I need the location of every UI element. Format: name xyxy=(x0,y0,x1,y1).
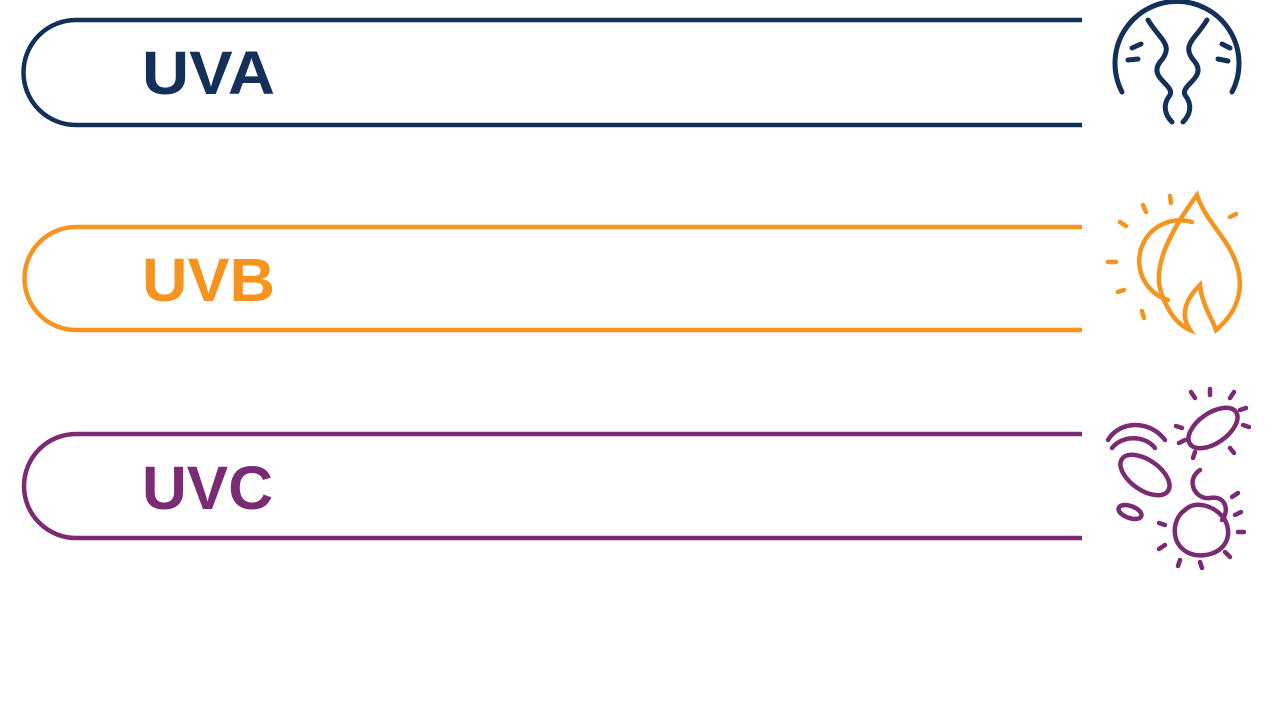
panel: UVB xyxy=(24,227,1082,330)
heading: UVC: UVC xyxy=(142,454,273,522)
heading: UVA: UVA xyxy=(142,39,275,107)
panel: UVC xyxy=(24,434,1082,538)
icon: sun and flame xyxy=(1108,195,1240,330)
heading: UVB: UVB xyxy=(142,246,275,314)
panel: UVA xyxy=(24,20,1082,125)
icon: nose xyxy=(1115,1,1239,122)
icon: bacteria xyxy=(1108,389,1249,568)
